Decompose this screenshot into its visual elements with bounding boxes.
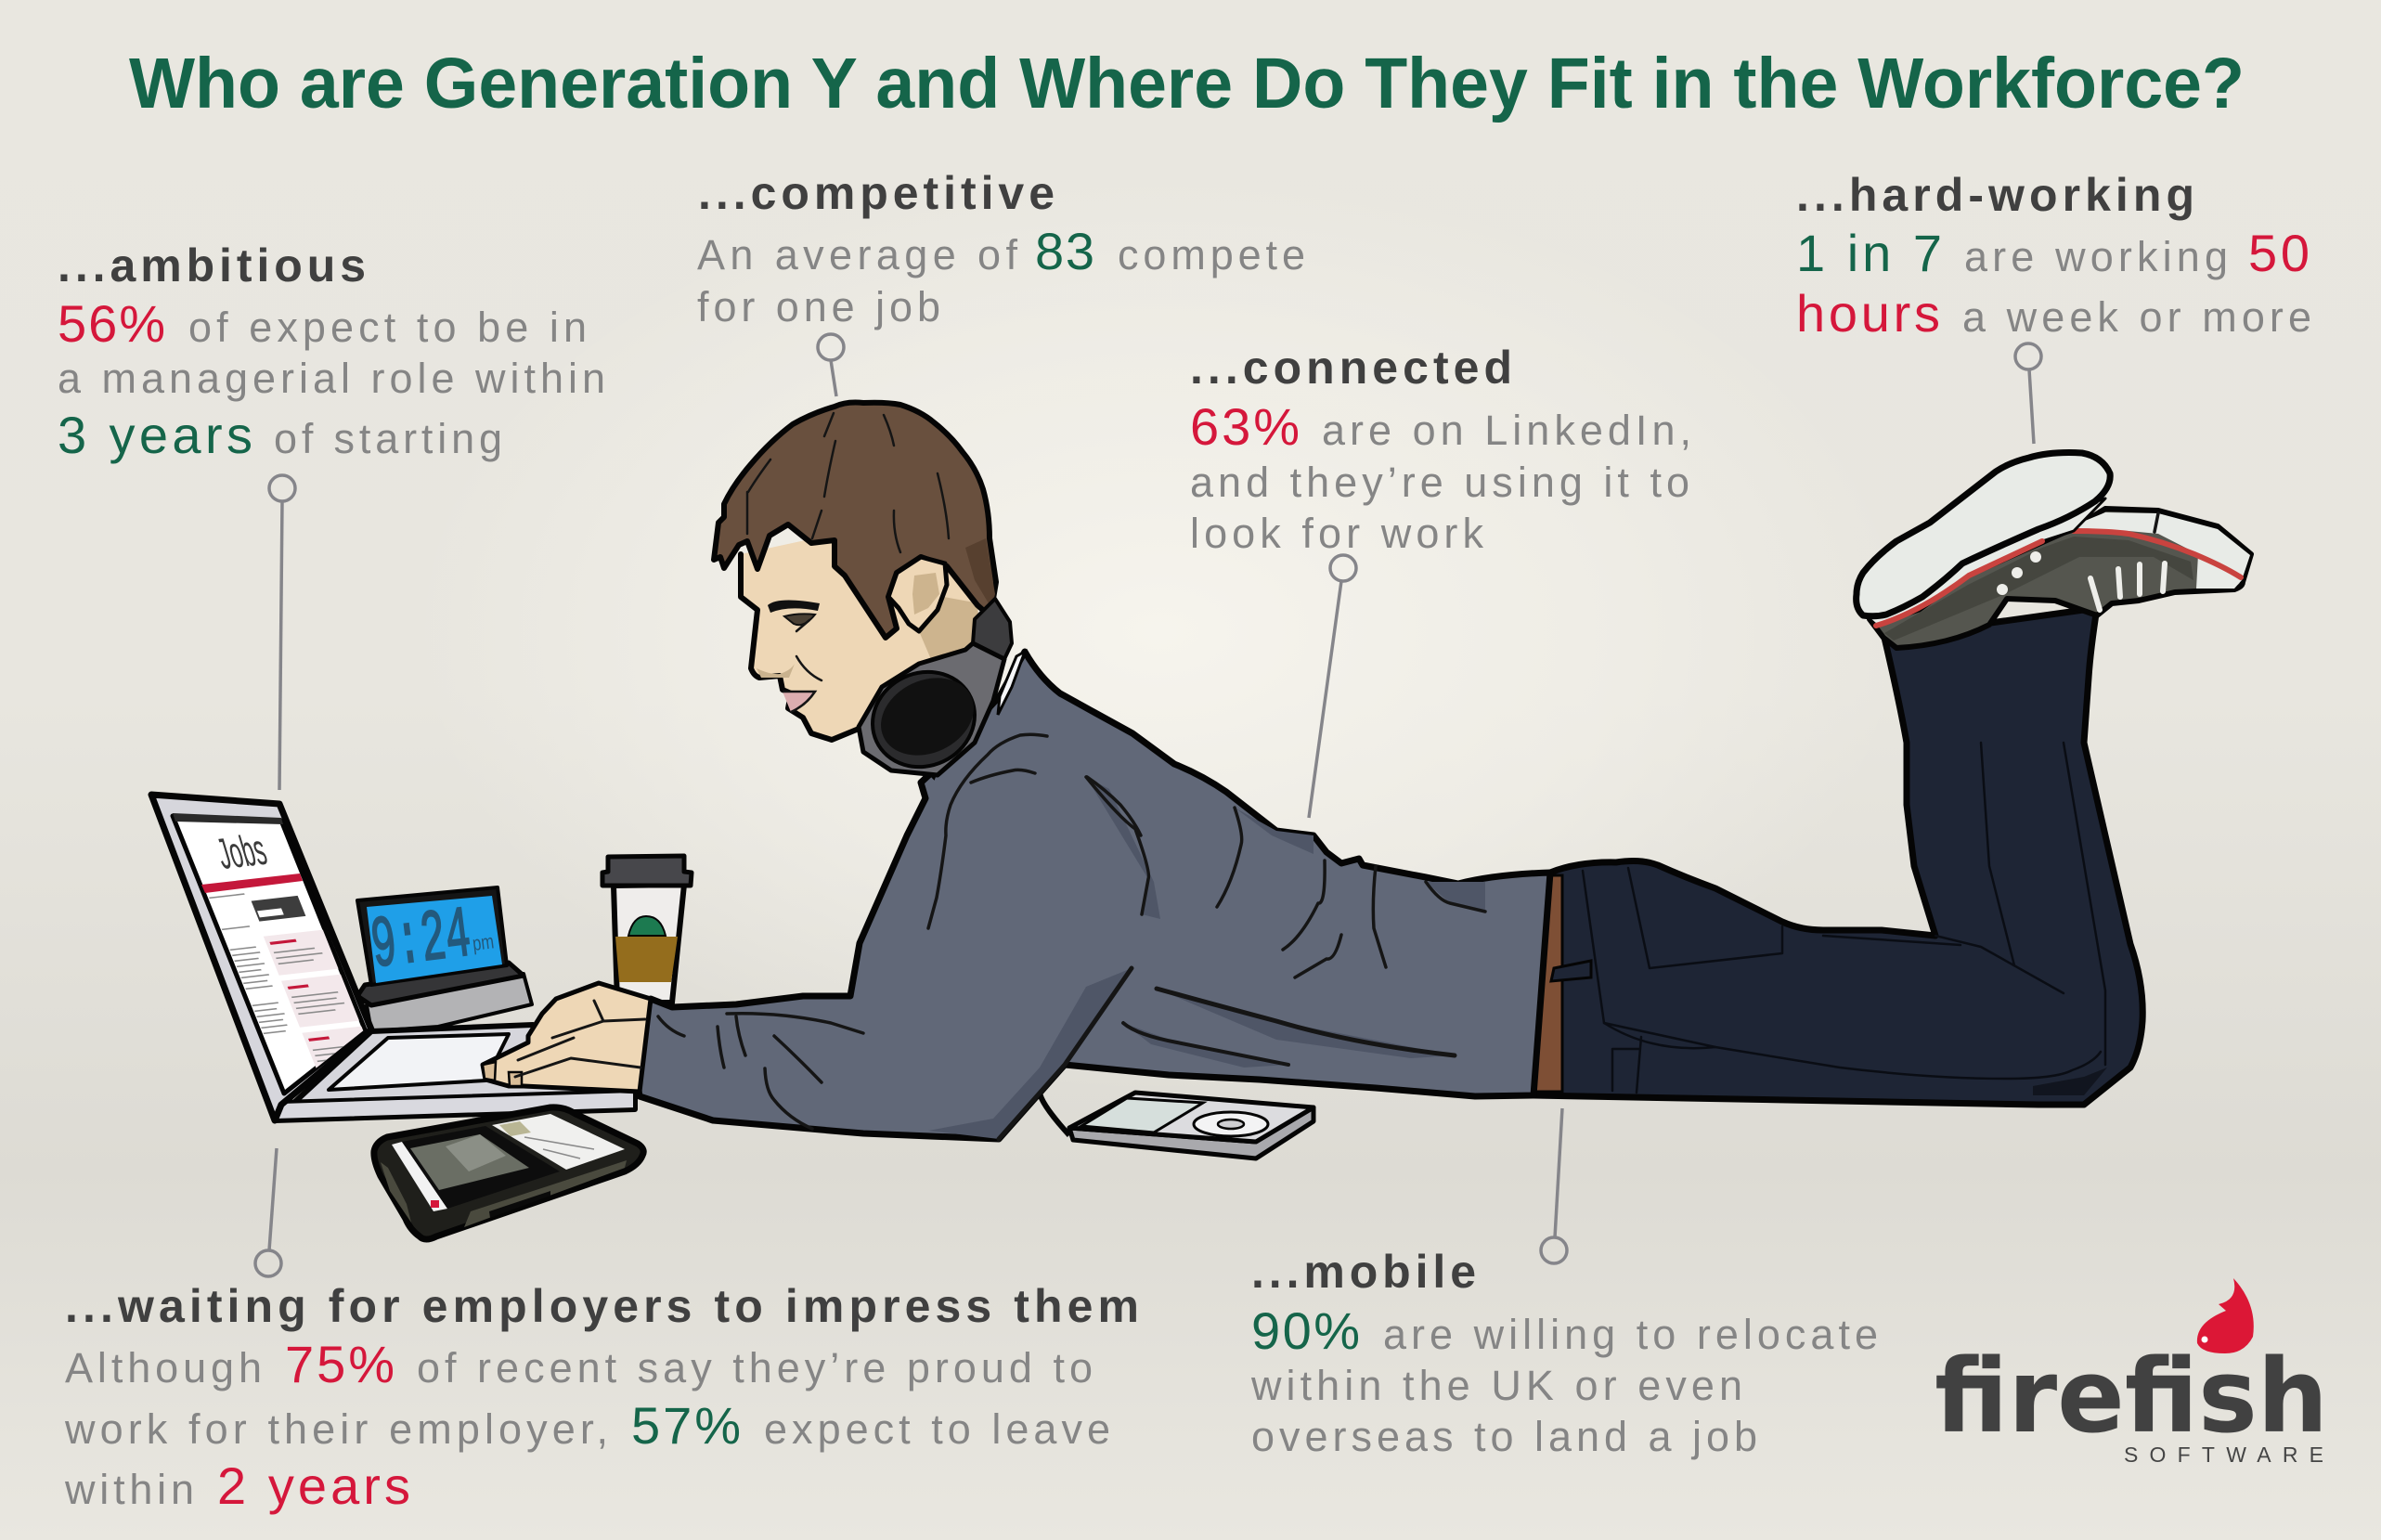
callout: connected: [1190, 342, 1691, 557]
logo: firefish software: [1935, 1278, 2328, 1467]
callout: hard-working: a week or more: [1962, 293, 2311, 341]
callout: ambitious: a managerial role within: [58, 355, 605, 402]
callout: waiting for employers: of recent say they’re proud to: [417, 1344, 1093, 1391]
upper shoe sole: [1857, 453, 2110, 616]
illustration: hand: [483, 983, 651, 1092]
illustration: shoes: [1857, 453, 2251, 648]
pointer: connected to jumper: [1309, 555, 1356, 818]
callout: waiting for employers: work for their employer,: [64, 1405, 608, 1453]
callout: waiting for employers: Although: [65, 1344, 262, 1391]
laces: [2090, 563, 2165, 610]
logo: firefish software: SOFTWARE: [2124, 1443, 2323, 1467]
illustration: coffee cup: [602, 856, 692, 1003]
callout: hard-working: ...hard-working: [1796, 169, 2194, 221]
pointer: mobile to phone area: [1541, 1108, 1567, 1263]
callout: ambitious: ...ambitious: [58, 239, 366, 291]
illustration: phone: [374, 1107, 643, 1239]
pointer: hard-working to shoes: [2015, 343, 2041, 444]
callout: connected: and they’re using it to: [1190, 459, 1689, 506]
illustration: laptop: [151, 795, 635, 1120]
pointer: ambitious to laptop: [269, 475, 295, 790]
callout: hard-working: are working: [1964, 233, 2228, 280]
callout: ambitious: 56%: [58, 294, 165, 353]
callout: waiting for employers: within: [64, 1466, 194, 1513]
callout: waiting for employers: [64, 1280, 1139, 1515]
callout: competitive: An average of: [697, 231, 1017, 278]
lower shoe upper: [1870, 509, 2251, 648]
callout: hard-working: [1796, 169, 2311, 343]
upper shoe strip: [1870, 498, 2105, 625]
title: Who are Generation Y and Where Do They Fit in the Workforce?: [129, 44, 2245, 123]
callout: hard-working: 1 in 7: [1796, 224, 1942, 282]
logo: firefish software: firefish: [1935, 1337, 2328, 1456]
illustration: head and face: [714, 403, 1000, 740]
screen heading text: Jobs: [211, 824, 272, 878]
illustration: digital clock: pm: [472, 929, 495, 955]
callout: waiting for employers: 2 years: [217, 1456, 410, 1515]
callout: competitive: for one job: [697, 283, 940, 330]
callout: waiting for employers: expect to leave: [764, 1405, 1110, 1453]
pointer: competitive to head: [818, 334, 844, 396]
illustration: mp3 player: [1069, 1093, 1313, 1158]
illustration: cable: [1040, 1068, 1069, 1135]
illustration: jeans: [1533, 608, 2142, 1105]
illustration: headphones: [857, 599, 1012, 783]
callout: competitive: [697, 167, 1305, 330]
callout: connected: look for work: [1190, 510, 1483, 557]
callout: ambitious: of expect to be in: [188, 304, 587, 351]
callout: competitive: 83: [1035, 222, 1094, 280]
callout: competitive: compete: [1118, 231, 1305, 278]
callout: waiting for employers: ...waiting for employers to impress them: [65, 1280, 1139, 1332]
callout: competitive: ...competitive: [698, 167, 1055, 219]
illustration: digital clock: [357, 887, 532, 1031]
callout: waiting for employers: 57%: [631, 1396, 741, 1455]
illustration: jumper: [637, 652, 1550, 1139]
callout: mobile: [1250, 1246, 1878, 1460]
callout: waiting for employers: 75%: [285, 1335, 395, 1393]
callout: mobile: ...mobile: [1251, 1246, 1476, 1298]
callout: mobile: within the UK or even: [1250, 1362, 1742, 1409]
illustration: digital clock: 9:24: [367, 895, 475, 989]
illustration: shirt collar: [917, 652, 1025, 778]
pointer: waiting to laptop: [255, 1148, 281, 1276]
callout: connected: ...connected: [1190, 342, 1512, 394]
callout: ambitious: 3 years: [58, 406, 252, 464]
callout: ambitious: of starting: [274, 415, 502, 462]
callout: hard-working: hours: [1796, 284, 1940, 343]
callout: mobile: 90%: [1251, 1301, 1360, 1360]
callout: mobile: overseas to land a job: [1251, 1413, 1757, 1460]
callout: ambitious: [58, 239, 605, 464]
ear: [888, 557, 947, 631]
illustration: belt: [1535, 875, 1591, 1092]
callout: connected: are on LinkedIn,: [1322, 407, 1691, 454]
callout: mobile: are willing to relocate: [1383, 1311, 1878, 1358]
face features: [757, 600, 822, 712]
callout: connected: 63%: [1190, 397, 1300, 456]
callout: hard-working: 50: [2248, 224, 2310, 282]
